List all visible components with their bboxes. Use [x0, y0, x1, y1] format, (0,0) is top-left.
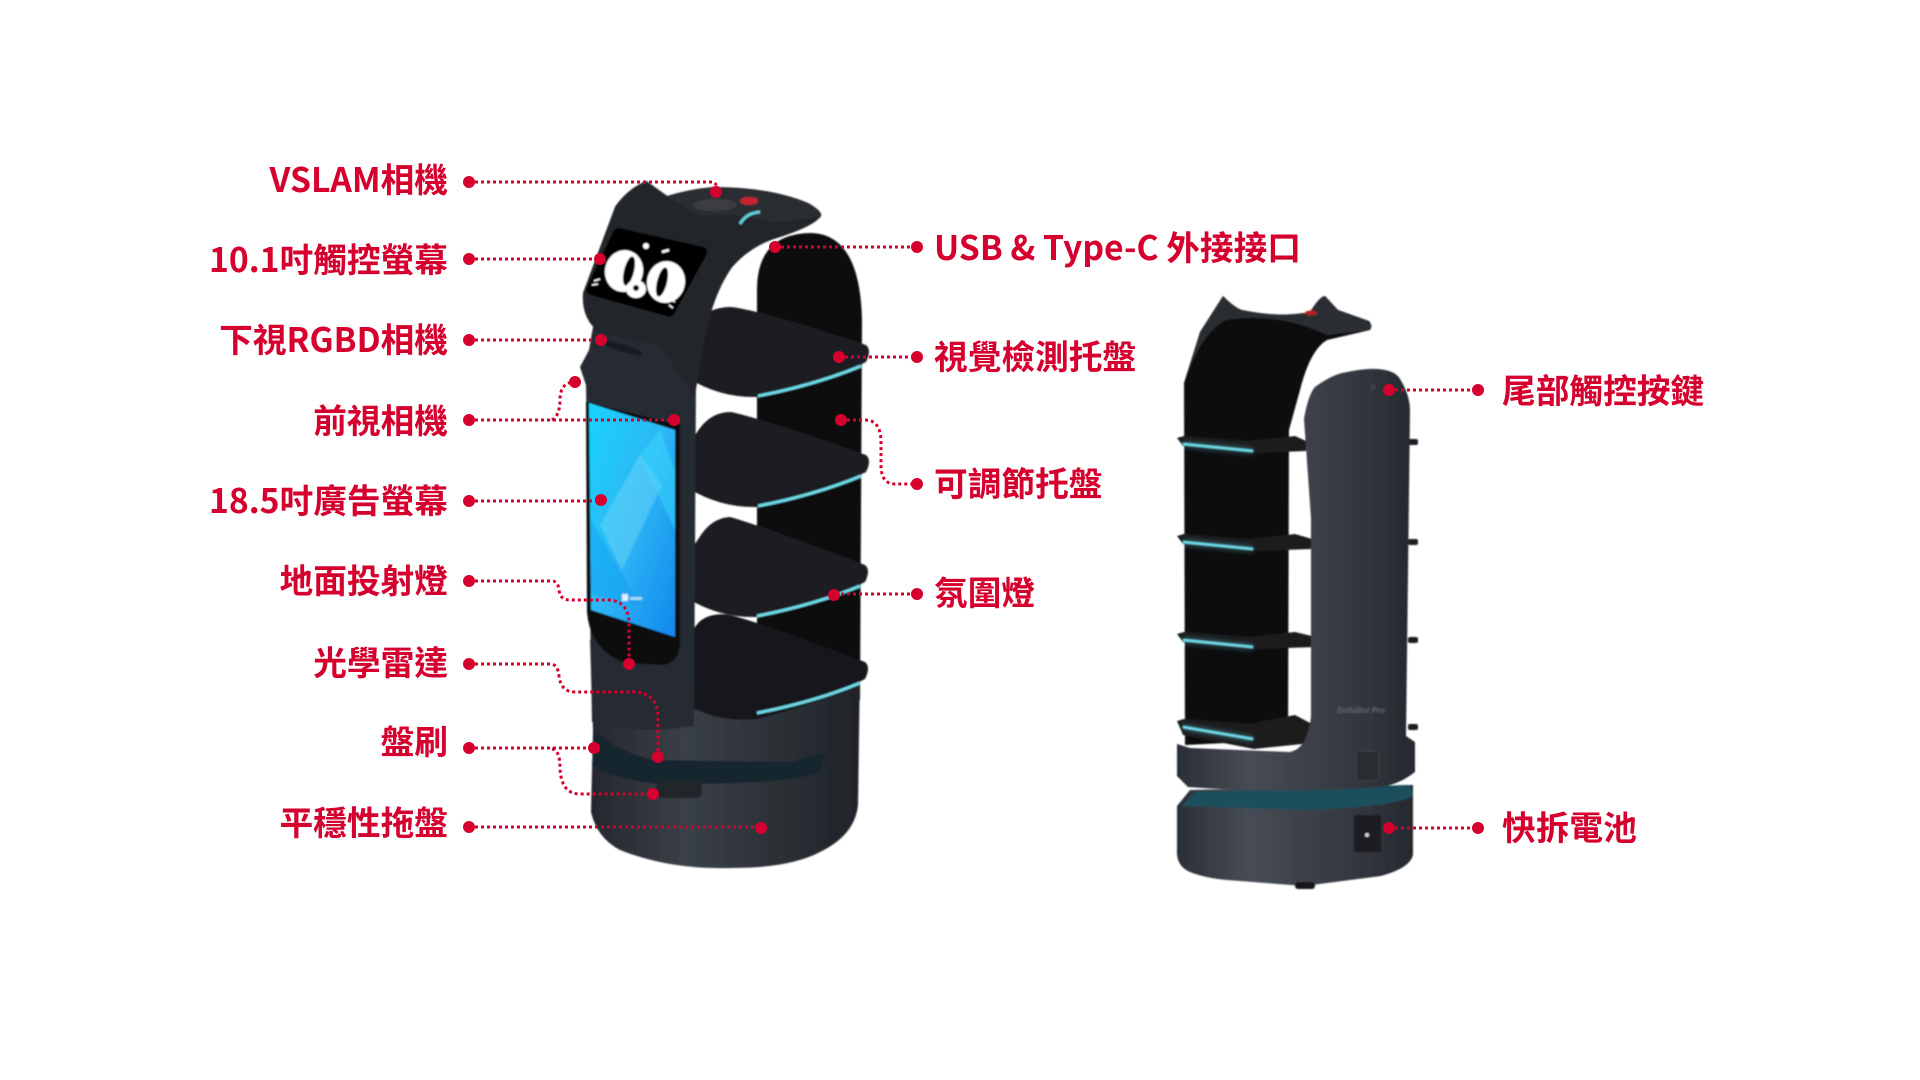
lower body and base — [590, 640, 860, 868]
rear trays — [1177, 436, 1418, 749]
back column — [757, 233, 862, 730]
callout: vision tray — [833, 330, 1136, 379]
advertising screen bezel — [586, 402, 680, 665]
whiskers — [592, 279, 675, 308]
rear black shell — [1184, 296, 1371, 745]
rear tray 3 — [1177, 632, 1418, 649]
callout: stabilizing mop: 平穩性拖盤 — [280, 796, 448, 845]
rear teal band — [1182, 785, 1413, 810]
callout: downward RGBD camera: 下視RGBD相機 — [219, 313, 448, 362]
left eye — [601, 247, 647, 295]
callout: ambient light: 氛圍燈 — [934, 566, 1035, 615]
nose — [626, 280, 646, 298]
advertising screen — [589, 403, 675, 637]
callout: floor projection light — [280, 554, 635, 670]
red button — [740, 197, 758, 205]
callout: quick release battery — [1383, 801, 1637, 850]
callout: rear touch button: 尾部觸控按鍵 — [1502, 364, 1704, 413]
callout: ambient light — [828, 566, 1035, 615]
rear wheel — [1295, 882, 1315, 889]
callout: advertising screen: 18.5吋廣告螢幕 — [209, 474, 448, 523]
brow marks — [643, 243, 649, 249]
callout: touch screen — [209, 233, 606, 282]
callout: USB ports: USB & Type-C 外接接口 — [934, 221, 1301, 270]
battery cover — [1354, 815, 1381, 852]
tray 2 — [688, 412, 869, 507]
head arch — [584, 182, 820, 395]
callout: stabilizing mop — [280, 796, 767, 845]
rear button — [1370, 384, 1376, 390]
front column — [580, 327, 696, 730]
main robot, front view — [580, 182, 869, 868]
callout: VSLAM camera: VSLAM相機 — [269, 153, 448, 202]
callout: disc brush: 盤刷 — [381, 715, 448, 764]
callout: rear touch button — [1383, 364, 1704, 413]
callout: lidar — [313, 636, 664, 763]
head top plate — [667, 188, 820, 222]
service trays — [687, 307, 869, 720]
callout: front camera: 前視相機 — [313, 394, 448, 443]
base bumper sensor — [656, 782, 702, 798]
callout: quick release battery: 快拆電池 — [1502, 801, 1637, 850]
tray 3 — [687, 517, 868, 617]
callout: adjustable tray — [835, 414, 1102, 506]
rear tower — [1177, 369, 1415, 790]
chin camera slot — [605, 340, 643, 356]
callout: downward RGBD camera — [219, 313, 607, 362]
rear tray 1 — [1177, 436, 1418, 453]
callout: vision tray: 視覺檢測托盤 — [934, 330, 1136, 379]
camera disc — [693, 199, 737, 211]
battery indicator — [1365, 833, 1369, 837]
callout: adjustable tray: 可調節托盤 — [934, 457, 1102, 506]
callout: USB ports — [769, 221, 1301, 270]
teal sensor band — [592, 732, 827, 784]
rear tray 2 — [1177, 534, 1418, 551]
teal arc — [740, 212, 760, 224]
tray 4 — [687, 614, 868, 720]
callout: touch screen: 10.1吋觸控螢幕 — [209, 233, 448, 282]
callout: front camera — [313, 376, 680, 443]
rear tray 4 — [1177, 715, 1418, 749]
callout: floor projection light: 地面投射燈 — [280, 554, 448, 603]
callout: disc brush — [381, 715, 659, 800]
rear robot, back view — [1177, 296, 1418, 889]
callout: advertising screen — [209, 474, 607, 523]
rear base — [1177, 785, 1413, 886]
face screen — [586, 228, 707, 317]
tray 1 — [688, 307, 869, 397]
callout: VSLAM camera — [269, 153, 722, 202]
switch panel — [1356, 751, 1379, 781]
product name: BellaBot Pro — [1337, 706, 1385, 715]
lidar window — [623, 668, 634, 688]
right eye — [643, 258, 689, 306]
callout: lidar: 光學雷達 — [313, 636, 448, 685]
rear head plate — [1186, 296, 1371, 380]
red rear light — [1305, 310, 1317, 316]
